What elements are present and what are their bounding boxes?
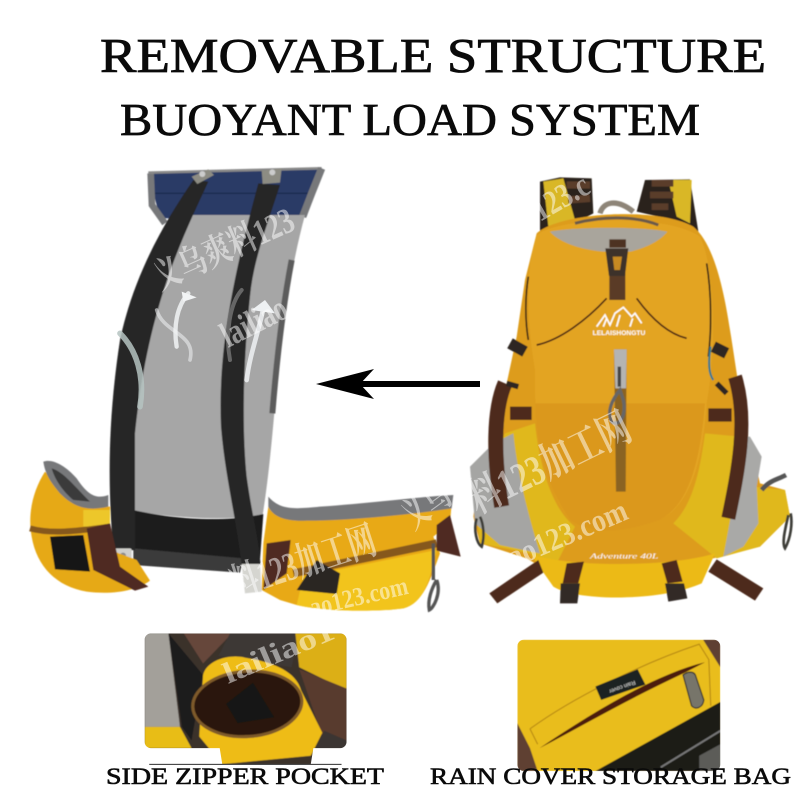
arrow pointing left	[316, 369, 480, 399]
watermarks: 义乌爽料123	[147, 200, 300, 297]
watermarks: ao123.com	[502, 492, 633, 574]
bottom yellow band	[530, 553, 715, 598]
watermarks	[147, 167, 639, 622]
lower front panel tone	[535, 403, 705, 531]
title	[100, 28, 766, 145]
bag body silhouette	[473, 214, 790, 578]
front panel	[528, 220, 713, 531]
watermarks: 料123加工网	[461, 404, 639, 523]
strap clips	[114, 168, 282, 593]
detail photo: rain cover storage bag	[517, 640, 720, 771]
right hip pad	[262, 495, 461, 611]
caption: side zipper pocket: SIDE ZIPPER POCKET	[106, 764, 384, 789]
shoulder straps behind bag	[540, 177, 698, 242]
side yellow lower panels	[475, 423, 790, 563]
title: REMOVABLE STRUCTURE	[100, 28, 766, 83]
watermarks: ao123.com	[307, 571, 411, 622]
right shoulder strap	[221, 183, 280, 565]
airflow arrows	[120, 290, 275, 407]
top zipper	[575, 218, 658, 225]
left shoulder strap	[110, 180, 208, 552]
side straps	[496, 343, 741, 518]
navy top panel	[148, 168, 322, 223]
brand logo	[593, 307, 646, 337]
mesh back panel	[126, 215, 305, 518]
side clips	[475, 475, 791, 548]
top grey patch	[550, 228, 667, 252]
model text: Adventure 40L	[588, 552, 658, 561]
watermarks: lailiao	[213, 288, 294, 355]
watermarks: 义乌	[394, 475, 458, 536]
brand logo: LELAISHONGTU	[593, 330, 646, 337]
lower frame and crossbar	[133, 510, 263, 573]
detached back frame with hip belt	[30, 168, 461, 611]
shadow line	[149, 764, 342, 765]
grey mesh side pockets	[470, 433, 762, 557]
watermarks: 123.c	[526, 167, 596, 229]
bottom straps and buckles	[489, 559, 763, 603]
title: BUOYANT LOAD SYSTEM	[120, 95, 700, 145]
vertical zipper	[610, 349, 627, 492]
right edge trim	[272, 260, 292, 413]
top buckle	[605, 239, 628, 300]
left hip pad	[30, 461, 150, 593]
panel seams	[526, 263, 711, 357]
watermarks: 料123加工网	[225, 517, 381, 607]
yellow backpack	[470, 177, 791, 603]
detail photo: side zipper pocket	[144, 634, 346, 765]
caption: rain cover storage bag: RAIN COVER STORAGE BAG	[430, 764, 791, 789]
detail photo: rain cover storage bag: Rain cover	[608, 679, 636, 694]
lailiao watermark on photo: lailiao1	[218, 614, 339, 690]
